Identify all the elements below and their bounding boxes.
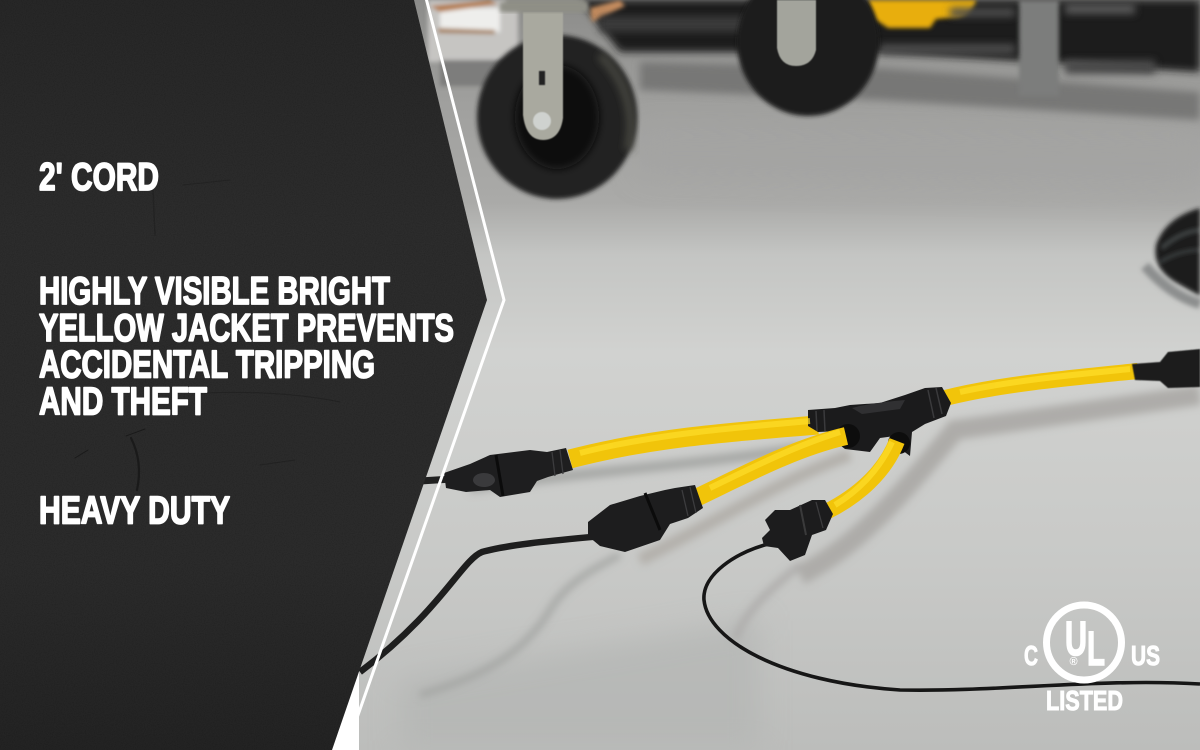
panel background (0, 0, 487, 750)
floor (359, 0, 1200, 750)
yellow equipment blob (868, 0, 976, 28)
UL listed certification mark (1024, 605, 1160, 716)
plug 1 (444, 448, 573, 497)
letter U: U (1065, 613, 1087, 666)
black cord: left plug tail (420, 479, 452, 481)
photo: floor and yellow cord (359, 0, 1200, 750)
rack rails (600, 4, 1155, 74)
feature text (39, 156, 454, 532)
bracket (777, 0, 816, 66)
plug 2 (588, 485, 703, 552)
ring (1046, 605, 1122, 680)
feature: highly visible yellow jacket: YELLOW JACKET PREVENTS (39, 307, 454, 350)
blurred background: equipment rack (428, 0, 1200, 120)
yellow cord: main (945, 371, 1138, 398)
yellow cord: branch 1 (570, 425, 818, 459)
yellow cord: branch 2 (698, 436, 846, 497)
background left highlights (428, 0, 625, 86)
panel texture and scratches (74, 180, 349, 702)
floor tone bands (421, 634, 750, 718)
us: US (1131, 640, 1160, 671)
wheel 2 (737, 0, 879, 116)
bracket (523, 12, 563, 140)
background dark band (580, 0, 1200, 72)
c: C (1024, 640, 1038, 671)
registered mark: ® (1070, 656, 1078, 668)
feature: highly visible yellow jacket: AND THEFT (39, 380, 207, 424)
letter L: L (1087, 623, 1105, 676)
white outline chevron (345, 0, 504, 750)
T connector (808, 387, 951, 456)
feature: highly visible yellow jacket (39, 270, 454, 424)
feature: heavy duty: HEAVY DUTY (39, 490, 230, 532)
black cord: middle plug (360, 536, 602, 672)
plug 3 (762, 500, 833, 561)
wheel 1 (477, 2, 637, 199)
tyre (737, 0, 879, 116)
feature: 2' cord: 2' CORD (39, 156, 159, 199)
right-edge plug (1132, 349, 1200, 388)
floor edge strip (640, 62, 1200, 120)
tyre (477, 35, 637, 199)
coiled cord top right (1145, 208, 1200, 304)
black cord: right plug (704, 543, 1200, 690)
cord shadows (420, 395, 1200, 695)
yellow cord: branch 3 (826, 441, 897, 512)
feature: highly visible yellow jacket: ACCIDENTAL TRIPPING (39, 344, 375, 386)
cord highlights (580, 369, 1130, 505)
grey post (1019, 0, 1059, 96)
feature: highly visible yellow jacket: HIGHLY VISIBLE BRIGHT (39, 270, 390, 313)
listed: LISTED (1046, 685, 1123, 716)
panel: dark angled feature panel (0, 0, 490, 750)
